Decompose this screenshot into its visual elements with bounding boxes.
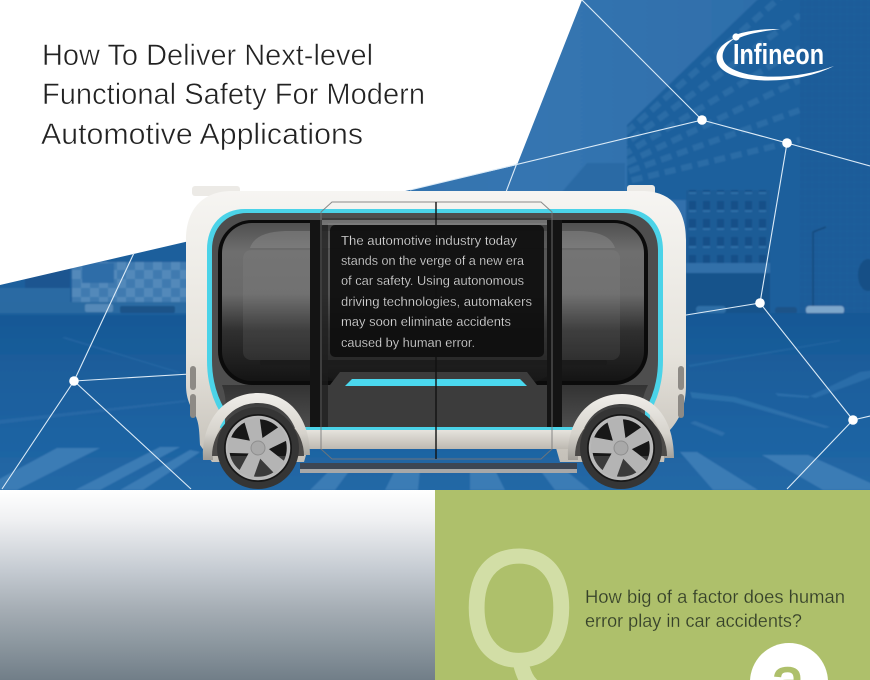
title: How To Deliver Next-level	[42, 39, 373, 72]
intro text: of car safety. Using autonomous	[341, 273, 524, 288]
window reflections	[250, 231, 615, 248]
hero photo background	[0, 0, 870, 498]
title: Automotive Applications	[41, 118, 363, 151]
body shell	[186, 191, 686, 462]
question text: error play in car accidents?	[585, 611, 802, 631]
network lines and nodes	[2, 0, 870, 489]
door pillars	[310, 220, 322, 428]
cyan door light	[345, 379, 527, 386]
logo: Infineon: Infineon	[733, 39, 824, 71]
vehicle info screen	[330, 225, 544, 357]
door area	[322, 218, 552, 384]
intro text: The automotive industry today	[341, 233, 517, 248]
intro text: caused by human error.	[341, 335, 475, 350]
sill	[305, 430, 573, 449]
intro text: stands on the verge of a new era	[341, 253, 525, 268]
right wheel	[575, 407, 667, 489]
window lower bar	[260, 360, 607, 365]
cyan trim	[207, 209, 663, 428]
door centre line	[435, 202, 437, 459]
title	[41, 39, 425, 151]
logo: Infineon	[717, 29, 834, 80]
dark side panel	[212, 213, 658, 428]
left fender	[203, 393, 310, 460]
window	[218, 220, 648, 385]
intro text: driving technologies, automakers	[341, 294, 532, 309]
question text: How big of a factor does human	[585, 587, 845, 607]
building: right grid wall	[797, 0, 870, 315]
autonomous shuttle vehicle	[186, 185, 686, 489]
answer badge	[750, 643, 828, 680]
building: angled facade	[627, 0, 800, 200]
intro text: may soon eliminate accidents	[341, 314, 511, 329]
intro text	[341, 233, 532, 350]
question text	[585, 587, 845, 631]
crosswalk and road markings	[0, 337, 870, 490]
tree	[858, 259, 870, 291]
right fender	[568, 394, 674, 460]
title: Functional Safety For Modern	[42, 78, 425, 111]
ground	[0, 313, 870, 498]
parked cars right	[696, 306, 844, 314]
side lights	[190, 366, 684, 418]
door outline	[321, 202, 552, 459]
door bottom cyan sill	[305, 427, 573, 430]
panel: question	[435, 490, 870, 680]
panel: gradient left	[0, 490, 435, 680]
lower body	[222, 385, 648, 428]
building: lower windows right of vehicle	[686, 190, 770, 263]
door header	[322, 220, 547, 225]
left buildings	[0, 240, 190, 315]
step bar	[300, 463, 577, 469]
roof bumps	[192, 186, 240, 196]
building: low block	[562, 163, 625, 192]
left wheel	[212, 407, 304, 489]
white diagonal title area	[0, 0, 582, 285]
lamp post	[813, 227, 826, 310]
